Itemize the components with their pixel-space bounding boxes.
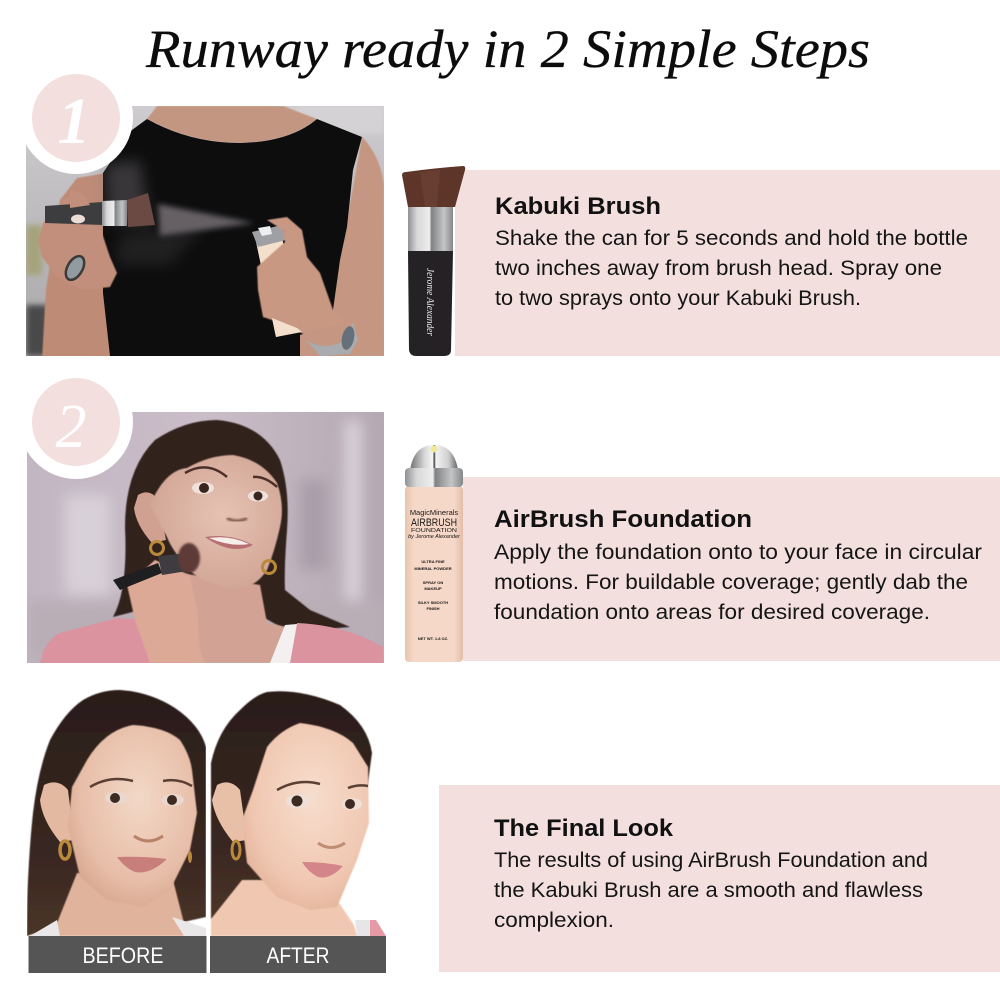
watch [306,322,358,356]
icon: airbrush foundation can: AIRBRUSH [411,517,457,529]
panel: step 1 [455,170,1000,356]
panel: final look [439,785,1000,972]
neck [53,873,190,936]
hair [211,691,372,919]
text: step 2 copy: Apply the foundation onto to your face in circular [494,540,982,564]
icon: airbrush foundation can: ULTRA FINE [421,559,445,564]
face [68,725,197,907]
text: final look copy: The Final Look [494,815,674,842]
left arm [42,173,112,360]
label: after: AFTER [266,943,330,968]
ear [40,782,74,842]
face [150,455,282,588]
shirt and pink sleeve [355,920,370,936]
left hand [38,204,118,288]
hair [27,690,206,936]
brush signature: Jerome Alexander [424,268,436,337]
icon: airbrush foundation can: FINISH [426,606,440,611]
text: step 1 copy: Shake the can for 5 seconds and hold the bottle [495,226,968,250]
smile [205,536,253,549]
icon: airbrush foundation can: by Jerome Alexander [408,534,461,540]
step number 1: 1 [58,85,90,158]
icon: airbrush foundation can: SPRAY ON [423,580,443,585]
text: step 1 copy [495,193,968,310]
neck [211,880,357,936]
text: step 2 copy [494,506,982,624]
right arm [333,137,384,356]
spray [158,204,254,236]
text: step 2 copy: AirBrush Foundation [494,506,752,533]
photo: spraying brush [26,106,384,360]
label: before: BEFORE [82,943,164,968]
panel: step 2 [463,477,1000,661]
text: final look copy: complexion. [494,908,614,932]
right hand [256,216,334,334]
icon: airbrush foundation can: SILKY SMOOTH [418,600,448,605]
icon: airbrush foundation can: FOUNDATION [411,528,457,534]
text: step 1 copy: two inches away from brush head. Spray one [495,256,942,280]
text: final look copy: the Kabuki Brush are a smooth and flawless [494,878,923,902]
spray can [256,240,294,337]
photo: before [27,690,206,936]
step number 1 [19,60,133,174]
black dress [103,119,362,356]
sweater [40,618,383,663]
text: final look copy [494,815,928,932]
step number 2 [19,365,133,479]
neck [147,106,317,143]
nose [227,518,247,521]
ear [212,782,247,842]
hand [127,560,205,663]
photo: after [211,691,386,936]
icon: airbrush foundation can: NET WT. 1.8 OZ. [418,636,448,641]
title: Runway ready in 2 Simple Steps [145,19,870,79]
application brush [113,563,162,590]
hair [113,420,350,632]
icon: kabuki brush [402,166,465,356]
face [242,723,369,910]
neck and chest [186,573,284,663]
icon: airbrush foundation can: MINERAL POWDER [414,566,452,571]
label: before [28,936,206,973]
text: step 1 copy: Kabuki Brush [495,193,661,220]
shirt [30,917,206,936]
text: final look copy: The results of using AirBrush Foundation and [494,848,928,872]
text: step 2 copy: foundation onto areas for desired coverage. [494,600,930,624]
text: step 1 copy: to two sprays onto your Kabuki Brush. [495,286,861,310]
step number 2: 2 [56,393,86,461]
earrings [150,542,164,554]
label: after [210,936,386,973]
ring [64,254,86,282]
text: step 2 copy: motions. For buildable coverage; gently dab the [494,570,968,594]
handheld brush [45,202,103,225]
eyes and brows [185,467,277,487]
icon: airbrush foundation can [405,445,463,662]
collar [270,624,297,663]
ear [134,492,166,543]
photo: applying foundation [27,412,384,663]
icon: airbrush foundation can: MagicMinerals [410,508,458,517]
icon: airbrush foundation can: MAKEUP [424,586,442,591]
